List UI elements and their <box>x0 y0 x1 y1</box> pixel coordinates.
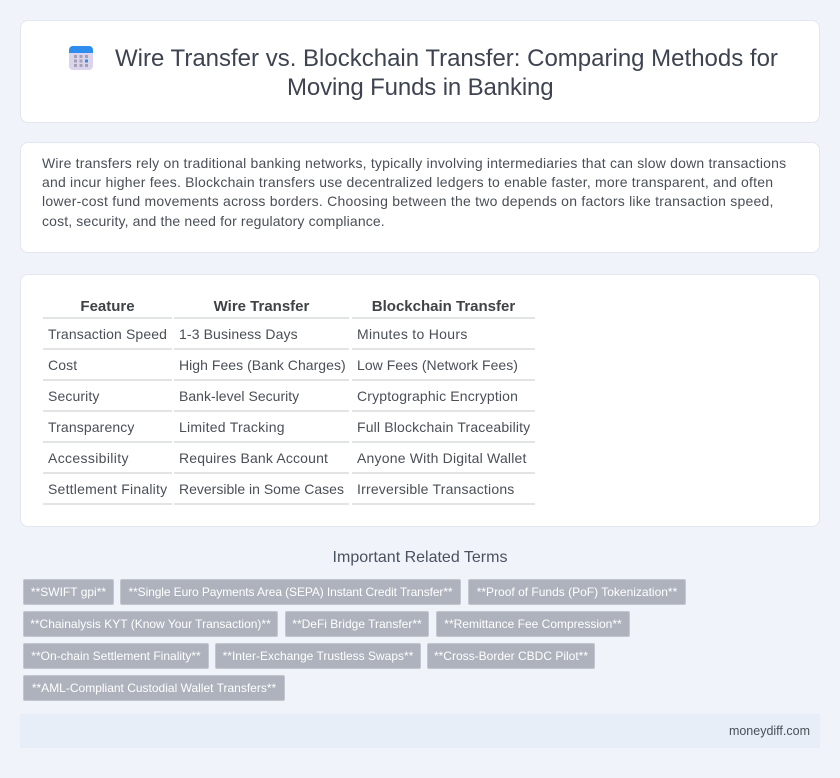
tag <box>427 643 595 669</box>
row: security: Cryptographic Encryption <box>357 388 518 404</box>
table panel <box>20 274 820 527</box>
tag <box>23 579 114 605</box>
row: cost <box>48 357 518 373</box>
row: accessibility: Anyone With Digital Wallet <box>357 450 527 466</box>
tag: **SWIFT gpi** <box>31 585 106 599</box>
tag <box>436 611 630 637</box>
row: cost: High Fees (Bank Charges) <box>179 357 346 373</box>
tag: **Remittance Fee Compression** <box>444 617 622 631</box>
row: settlement finality: Reversible in Some Cases <box>179 481 344 497</box>
row: transparency: Full Blockchain Traceability <box>357 419 530 435</box>
table header row: Blockchain Transfer <box>372 298 515 315</box>
tag <box>120 579 461 605</box>
table header row: Feature <box>80 298 135 315</box>
footer bar <box>20 714 820 748</box>
row: security: Security <box>48 388 100 404</box>
tag <box>468 579 686 605</box>
tag <box>215 643 421 669</box>
footer bar: moneydiff.com <box>729 724 810 738</box>
row: accessibility <box>48 450 527 466</box>
row: transparency: Limited Tracking <box>179 419 285 435</box>
tag: **Inter-Exchange Trustless Swaps** <box>223 649 413 663</box>
related terms heading: Important Related Terms <box>333 549 507 566</box>
comparison table <box>43 298 535 505</box>
related term tags <box>23 579 686 701</box>
icon: calendar grid <box>69 46 93 70</box>
header panel <box>20 20 820 123</box>
tag: **Chainalysis KYT (Know Your Transaction)** <box>30 617 271 631</box>
row: settlement finality: Irreversible Transactions <box>357 481 515 497</box>
row: settlement finality <box>48 481 515 497</box>
intro text: Wire transfers rely on traditional banking networks, typically involving intermediaries that can slow down transactions <box>42 155 786 171</box>
row: transparency: Transparency <box>48 419 135 435</box>
tag: **Proof of Funds (PoF) Tokenization** <box>477 585 677 599</box>
tag <box>23 611 278 637</box>
row: transparency <box>48 419 530 435</box>
tag: **Single Euro Payments Area (SEPA) Instant Credit Transfer** <box>129 585 452 599</box>
table header row: Wire Transfer <box>214 298 309 315</box>
tag: **DeFi Bridge Transfer** <box>292 617 422 631</box>
tag <box>285 611 429 637</box>
row: transaction speed: 1-3 Business Days <box>179 326 298 342</box>
row: settlement finality: Settlement Finality <box>48 481 167 497</box>
tag <box>23 643 209 669</box>
title <box>115 45 778 101</box>
intro text: and incur higher fees. Blockchain transfers use decentralized ledgers to enable faster, more transparent, and often <box>42 174 773 190</box>
tag <box>23 675 285 701</box>
intro text: lower-cost fund movements across borders. Choosing between the two depends on factors like transaction speed, <box>42 193 774 209</box>
intro text: cost, security, and the need for regulatory compliance. <box>42 213 385 229</box>
row: cost: Cost <box>48 357 77 373</box>
row: transaction speed: Minutes to Hours <box>357 326 468 342</box>
row: security <box>48 388 518 404</box>
intro panel <box>20 142 820 253</box>
tag: **Cross-Border CBDC Pilot** <box>434 649 588 663</box>
row: accessibility: Accessibility <box>48 450 129 466</box>
row: security: Bank-level Security <box>179 388 299 404</box>
intro text <box>42 155 786 229</box>
table header row <box>80 298 515 315</box>
row: transaction speed <box>48 326 468 342</box>
row: transaction speed: Transaction Speed <box>48 326 167 342</box>
title: Wire Transfer vs. Blockchain Transfer: Comparing Methods for <box>115 45 778 72</box>
tag: **AML-Compliant Custodial Wallet Transfers** <box>32 681 276 695</box>
tag: **On-chain Settlement Finality** <box>31 649 201 663</box>
row: accessibility: Requires Bank Account <box>179 450 328 466</box>
title: Moving Funds in Banking <box>287 74 554 101</box>
row: cost: Low Fees (Network Fees) <box>357 357 518 373</box>
